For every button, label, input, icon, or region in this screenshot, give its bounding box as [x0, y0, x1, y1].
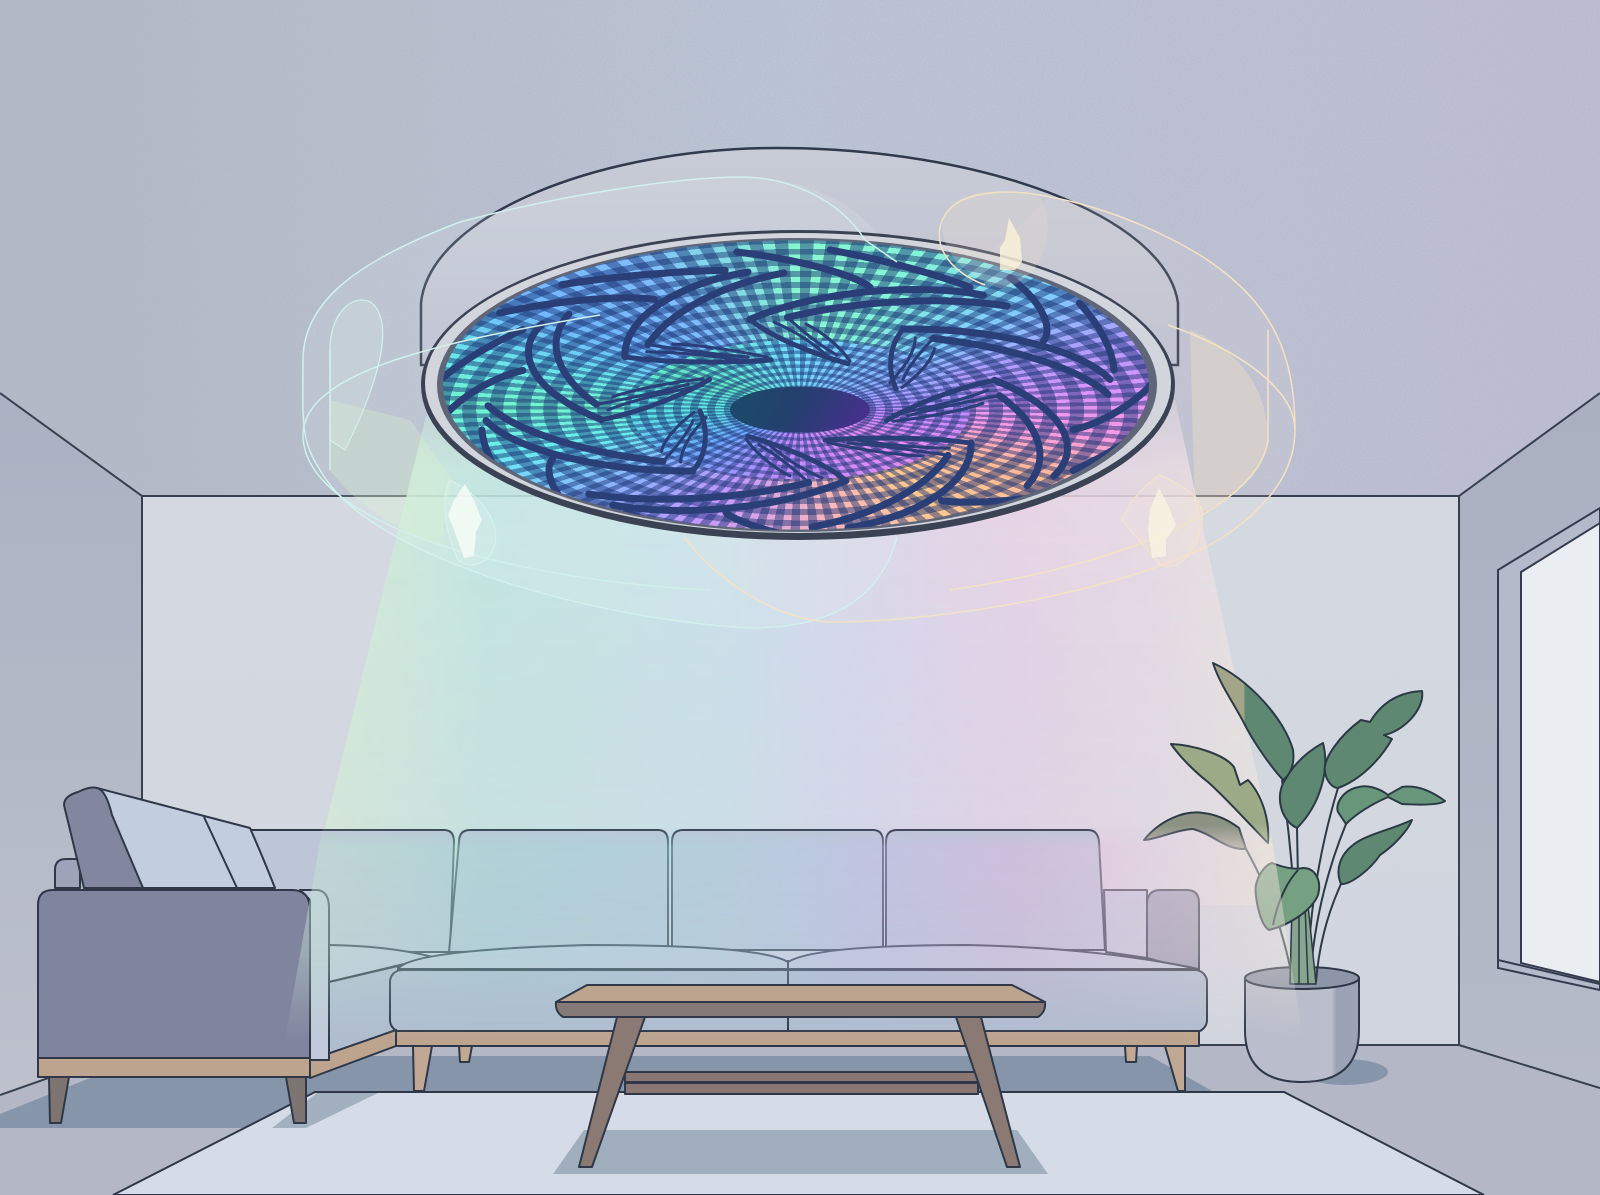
teal side pill — [330, 300, 383, 450]
right armrest — [1104, 890, 1147, 958]
window — [1498, 508, 1600, 990]
base strip — [395, 1031, 1199, 1046]
bump behind chair — [55, 859, 80, 888]
armrest side — [300, 890, 329, 1060]
light beam on wall — [324, 400, 1276, 864]
teal glass fill — [303, 177, 897, 628]
left seat section — [329, 945, 433, 982]
plant — [1144, 663, 1445, 984]
table edge — [556, 1002, 1045, 1017]
LED panel with dotted light pattern — [443, 240, 1149, 530]
wall outlines — [0, 393, 1600, 1095]
inner LED rings — [630, 340, 970, 479]
teal glass blade outline — [303, 177, 897, 628]
floor shadows — [0, 1056, 1388, 1128]
central dark hole — [730, 387, 870, 433]
orange glass fill — [684, 197, 1295, 622]
right wall — [1459, 393, 1600, 1088]
coffee table shadow — [553, 1130, 1048, 1174]
lower right light icon — [1148, 488, 1176, 558]
orange side panel — [1190, 330, 1268, 515]
table legs — [579, 1017, 1020, 1167]
leaves — [1213, 663, 1293, 780]
armchair block — [38, 890, 310, 1058]
ceiling light housing — [421, 148, 1178, 365]
armchair base strip — [38, 1058, 310, 1077]
teal glass band — [303, 315, 711, 590]
left wall — [0, 393, 142, 1095]
stems — [1246, 780, 1346, 982]
lower left glass pill — [445, 480, 496, 565]
back wall — [142, 496, 1459, 1046]
seat cushions tops — [398, 945, 1198, 969]
top right light icon — [1000, 218, 1022, 270]
pinwheel blades — [443, 246, 1149, 530]
disc bezel — [421, 230, 1175, 540]
sofa — [38, 788, 1207, 1123]
table top — [556, 985, 1045, 1002]
ceiling — [0, 0, 1600, 496]
seat front — [390, 970, 1207, 1032]
green glow panel — [330, 400, 452, 545]
table shelf — [625, 1072, 978, 1094]
plant pot — [1245, 967, 1359, 1082]
coffee table — [556, 985, 1045, 1167]
floor — [0, 1045, 1600, 1195]
orange glass blade outline — [684, 192, 1295, 622]
rug shadow corner — [272, 1093, 378, 1128]
back legs — [413, 1046, 1185, 1091]
light beam tint on furniture — [285, 825, 1303, 1040]
back cushions — [250, 830, 1105, 952]
leaning cushion — [97, 788, 275, 888]
armchair legs — [49, 1077, 306, 1123]
top right glass pill — [943, 191, 1048, 288]
lower left light icon — [448, 484, 482, 558]
lower right glass pill — [1122, 475, 1202, 567]
LED rim vignette — [443, 240, 1149, 530]
rug — [113, 1092, 1484, 1195]
orange glass band — [950, 325, 1295, 590]
pinwheel blades and glass overlay — [302, 176, 1296, 629]
